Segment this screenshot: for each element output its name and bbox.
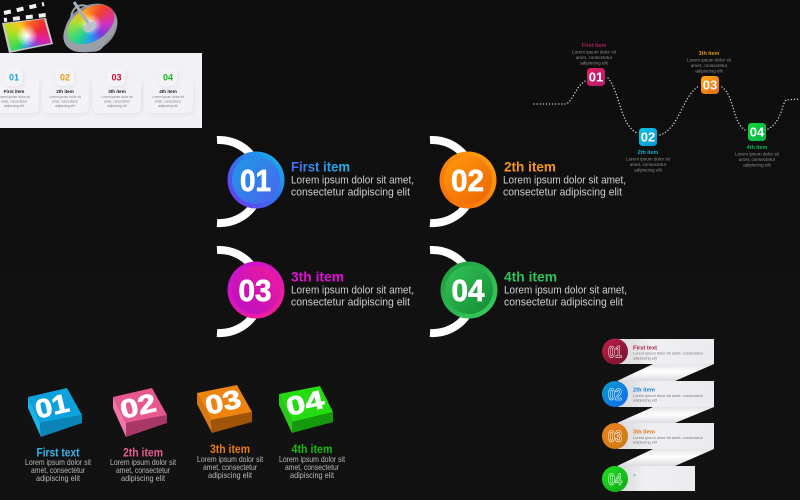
- wave step 01: 01: [589, 70, 603, 84]
- panel: cube item 04: [279, 384, 346, 480]
- step card 01: [0, 68, 39, 113]
- step card 04: 04: [163, 72, 173, 82]
- panel: cube item 01: Lorem ipsum dolor sit: [25, 457, 92, 467]
- panel: cube item 03: [197, 383, 264, 480]
- wave step 02: 2th item: [638, 150, 659, 156]
- panel: cube item 03: adipiscing elit: [208, 470, 253, 480]
- ribbon item 02: Lorem ipsum dolor sit amet, consectetur: [633, 394, 704, 398]
- panel: folded ribbon list: [602, 338, 714, 492]
- wave step 04: Lorem ipsum dolor sit: [735, 152, 780, 156]
- panel: circle item 04: [430, 250, 627, 333]
- icon: Motion gyroscope: [55, 0, 125, 62]
- panel: cube item 01: 01: [32, 388, 72, 424]
- panel: circle item 01: [217, 140, 414, 223]
- wave step 02: 02: [641, 130, 655, 144]
- wave step 03: [687, 51, 732, 94]
- step card 01: adipiscing elit: [4, 104, 24, 108]
- panel: circle item 01: consectetur adipiscing elit: [291, 186, 410, 198]
- panel: circle item 04: 4th item: [504, 268, 557, 284]
- panel: circle item 03: [217, 250, 414, 333]
- step card 03: adipiscing elit: [107, 104, 127, 108]
- panel: circle item 04: Lorem ipsum dolor sit amet,: [504, 284, 627, 296]
- step card 02: 02: [60, 72, 70, 82]
- step card 03: 3th item: [108, 89, 126, 94]
- panel: cube item 01: amet, consectetur: [31, 465, 85, 475]
- panel: circle item 03: consectetur adipiscing elit: [291, 296, 410, 308]
- panel: cube item 01: First text: [36, 448, 80, 460]
- wave step 02: adipiscing elit: [634, 168, 663, 172]
- ribbon item 02: adipiscing elit: [633, 398, 658, 402]
- ribbon item 03: Lorem ipsum dolor sit amet, consectetur: [633, 436, 704, 440]
- panel: circle item 01: Lorem ipsum dolor sit amet,: [291, 174, 414, 186]
- panel: circle item 04: consectetur adipiscing elit: [504, 296, 623, 308]
- wave step 04: adipiscing elit: [743, 162, 772, 168]
- panel: circle item 01: First item: [291, 158, 350, 174]
- ribbon item 04: [602, 466, 636, 492]
- ribbon item 02: 02: [608, 385, 622, 404]
- panel: cube item 04: amet, consectetur: [285, 462, 339, 472]
- icon: Final Cut clapperboard: [2, 2, 53, 53]
- panel: circle item 02: [430, 140, 626, 223]
- wave step 01: amet, consectetur: [576, 55, 613, 60]
- panel: neumorphic light steps: [0, 53, 202, 128]
- panel: cube item 02: amet, consectetur: [116, 465, 170, 475]
- ribbon item 03: adipiscing elit: [633, 440, 658, 444]
- panel: cube item 02: Lorem ipsum dolor sit: [110, 457, 177, 467]
- step card 04: adipiscing elit: [158, 104, 178, 108]
- panel: circle item 02: 2th item: [504, 158, 556, 174]
- panel: cube item 04: Lorem ipsum dolor sit: [279, 454, 346, 464]
- step card 03: Lorem ipsum dolor sit: [101, 95, 133, 99]
- ribbon item 01: Lorem ipsum dolor sit amet, consectetur: [633, 352, 704, 356]
- panel: circle item 03: 03: [238, 273, 272, 308]
- panel: cube item 03: Lorem ipsum dolor sit: [197, 454, 264, 464]
- panel: cube item 02: [110, 387, 177, 483]
- wave step 01: [572, 43, 617, 86]
- panel: circle item 04: 04: [452, 273, 485, 308]
- ribbon item 02: 2th item: [633, 388, 655, 394]
- step card 03: 03: [111, 72, 122, 82]
- panel: cube item 02: adipiscing elit: [121, 473, 166, 483]
- wave step 03: Lorem ipsum dolor sit: [687, 58, 732, 62]
- panel: cube item 03: 03: [202, 383, 244, 421]
- panel: cube item 04: 04: [283, 384, 328, 422]
- panel: circle item 02: Lorem ipsum dolor sit amet,: [503, 174, 626, 186]
- wave step 02: amet, consectetur: [630, 162, 667, 167]
- ribbon item 03: [602, 423, 704, 449]
- panel: circle item 01: 01: [240, 163, 271, 198]
- step card 04: 4th item: [159, 89, 177, 94]
- panel: circle item 02: consectetur adipiscing elit: [503, 186, 622, 198]
- panel: circle item 03: 3th item: [291, 268, 344, 284]
- wave step 03: amet, consectetur: [691, 63, 728, 68]
- wave step 04: [735, 123, 780, 168]
- ribbon item 01: First text: [633, 346, 657, 352]
- panel: cube item 04: 4th item: [292, 444, 332, 456]
- wave step 04: amet, consectetur: [739, 157, 776, 162]
- step card 02: adipiscing elit: [55, 104, 75, 108]
- panel: cube item 02: 02: [117, 387, 159, 425]
- step card 04: [144, 68, 193, 113]
- step card 01: 01: [9, 72, 19, 82]
- panel: cube item 03: amet, consectetur: [203, 462, 257, 472]
- wave step 01: Lorem ipsum dolor sit: [572, 50, 617, 54]
- chart: dotted wave timeline: [534, 43, 800, 172]
- ribbon item 03: 03: [608, 427, 622, 446]
- step card 03: amet, consectetur: [104, 100, 131, 104]
- step card 04: amet, consectetur: [155, 100, 182, 104]
- panel: cube item 04: adipiscing elit: [290, 470, 335, 480]
- wave step 01: adipiscing elit: [580, 60, 609, 66]
- wave step 03: 03: [703, 78, 717, 92]
- step card 03: [93, 68, 141, 113]
- wave step 04: 4th item: [747, 145, 768, 151]
- ribbon item 04: 04: [608, 470, 622, 489]
- ribbon item 01: adipiscing elit: [633, 356, 658, 360]
- ribbon item 03: 3th item: [633, 430, 655, 436]
- panel: cube item 01: [25, 388, 92, 483]
- step card 02: [42, 68, 89, 113]
- wave step 03: 3th item: [699, 51, 720, 57]
- step card 02: Lorem ipsum dolor sit: [49, 95, 81, 99]
- wave step 01: First item: [582, 43, 606, 49]
- ribbon item 01: 01: [608, 342, 622, 362]
- wave step 02: [626, 128, 671, 172]
- step card 01: amet, consectetur: [1, 100, 28, 104]
- ribbon item 01: [602, 338, 704, 364]
- step card 02: 2th item: [56, 89, 74, 94]
- step card 02: amet, consectetur: [52, 100, 79, 104]
- panel: cube item 02: 2th item: [123, 448, 163, 460]
- ribbon item 02: [602, 381, 704, 407]
- step card 04: Lorem ipsum dolor sit: [152, 95, 184, 99]
- step card 01: First item: [4, 89, 24, 94]
- wave step 04: 04: [750, 124, 765, 140]
- panel: circle item 03: Lorem ipsum dolor sit amet,: [291, 284, 414, 296]
- wave step 02: Lorem ipsum dolor sit: [626, 156, 671, 162]
- panel: cube item 03: 3th item: [210, 444, 250, 456]
- panel: cube item 01: adipiscing elit: [36, 473, 81, 483]
- wave step 03: adipiscing elit: [695, 68, 724, 74]
- panel: circle item 02: 02: [451, 163, 484, 198]
